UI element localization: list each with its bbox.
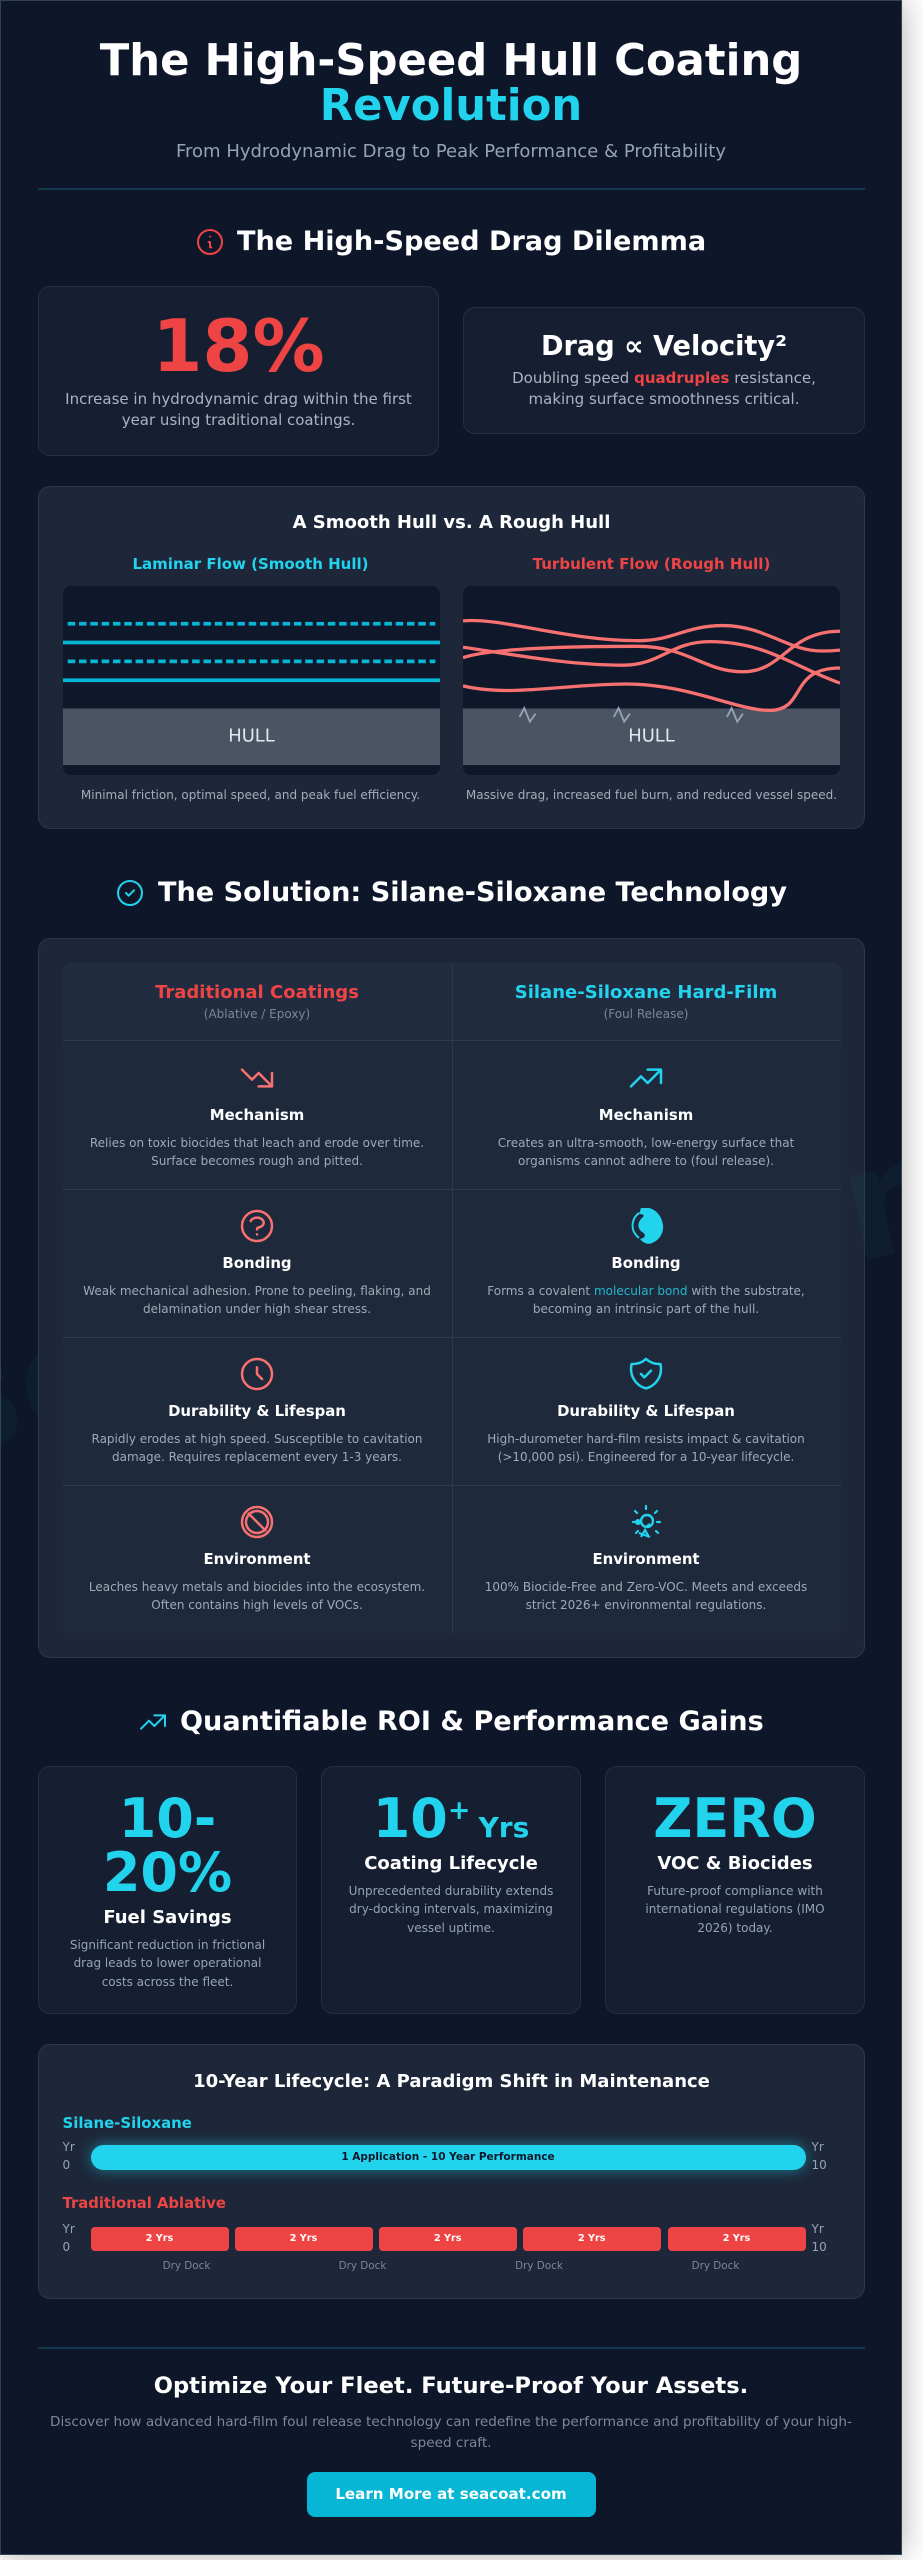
icon: trending up <box>140 1714 166 1730</box>
header: traditional: (Ablative / Epoxy) <box>204 1007 310 1021</box>
label: VOC & Biocides <box>657 1853 813 1874</box>
bar: single application: 1 Application - 10 Year Performance <box>341 2151 555 2163</box>
explanation: making surface smoothness critical. <box>529 390 799 408</box>
panel title: A Smooth Hull vs. A Rough Hull <box>293 512 610 533</box>
dry dock markers: Dry Dock <box>515 2260 563 2272</box>
stat card: fuel savings <box>38 1766 297 2014</box>
dry dock markers: Dry Dock <box>339 2260 386 2272</box>
cell: silane environment: 100% Biocide-Free and Zero-VOC. Meets and exceeds <box>485 1580 807 1594</box>
cell: silane bonding: becoming an intrinsic part of the hull. <box>533 1302 759 1316</box>
cell: traditional durability <box>92 1358 422 1464</box>
description: costs across the fleet. <box>102 1975 233 1989</box>
description: international regulations (IMO <box>645 1902 825 1916</box>
diagram: laminar flow <box>62 586 440 774</box>
title: Revolution <box>320 81 582 131</box>
cell: silane environment: Environment <box>592 1550 700 1568</box>
cell: traditional environment: Environment <box>203 1550 311 1568</box>
stat card: lifecycle <box>321 1766 581 2014</box>
cell: traditional mechanism: Relies on toxic biocides that leach and erode over time. <box>90 1136 424 1150</box>
value: 20% <box>103 1841 232 1904</box>
silane timeline: Yr <box>62 2140 75 2154</box>
bars: five 2-year segments: 2 Yrs <box>290 2232 317 2244</box>
panel: lifecycle timeline <box>38 2044 865 2299</box>
cell: traditional durability: Durability & Lifespan <box>168 1402 346 1420</box>
stat card: 18% <box>38 286 439 456</box>
ablative timeline: Yr <box>62 2222 75 2236</box>
bar: single application <box>90 2145 806 2170</box>
cell: silane mechanism: Mechanism <box>599 1106 693 1124</box>
big number: 18% <box>152 304 325 388</box>
bars: five 2-year segments: 2 Yrs <box>723 2232 750 2244</box>
cell: silane bonding <box>487 1208 805 1316</box>
title <box>100 36 802 131</box>
heading text: Quantifiable ROI & Performance Gains <box>180 1706 764 1737</box>
panel: comparison table <box>63 963 841 1633</box>
dry dock markers: Dry Dock <box>692 2260 739 2272</box>
bars: five 2-year segments <box>91 2227 806 2251</box>
call to action <box>50 2373 852 2517</box>
title: The High-Speed Hull Coating <box>100 36 802 86</box>
cell: silane mechanism: organisms cannot adhere to (foul release). <box>518 1154 774 1168</box>
ablative timeline <box>62 2222 827 2254</box>
description <box>70 1938 265 1989</box>
header: traditional: Traditional Coatings <box>155 982 359 1003</box>
comparison grid <box>62 963 840 1633</box>
CTA button <box>306 2472 596 2517</box>
diagram: turbulent flow <box>463 586 840 774</box>
header: traditional <box>155 982 359 1021</box>
cell: silane mechanism: Creates an ultra-smooth, low-energy surface that <box>498 1136 794 1150</box>
description: Significant reduction in frictional <box>70 1938 265 1952</box>
description: Increase in hydrodynamic drag within the first <box>65 390 412 408</box>
panel: smooth vs rough hull <box>38 486 865 829</box>
cell: traditional durability: Rapidly erodes at high speed. Susceptible to cavitation <box>92 1432 422 1446</box>
CTA text: speed craft. <box>410 2435 491 2451</box>
ablative label: Traditional Ablative <box>62 2195 226 2212</box>
cell: silane bonding: Forms a covalent molecular bond with the substrate, <box>487 1284 805 1298</box>
bars: five 2-year segments: 2 Yrs <box>434 2232 461 2244</box>
value <box>103 1787 232 1904</box>
ablative timeline: 0 <box>62 2240 70 2254</box>
timeline title: 10-Year Lifecycle: A Paradigm Shift in Maintenance <box>193 2071 710 2092</box>
explanation: Doubling speed quadruples resistance, <box>512 368 816 386</box>
heading text: The Solution: Silane-Siloxane Technology <box>158 877 787 908</box>
label: turbulent: Turbulent Flow (Rough Hull) <box>533 555 770 573</box>
cell: silane environment: strict 2026+ environmental regulations. <box>526 1598 766 1612</box>
cell: traditional mechanism <box>90 1068 424 1168</box>
cell: silane durability: (>10,000 psi). Engineered for a 10-year lifecycle. <box>498 1450 794 1464</box>
cell: traditional environment: Often contains high levels of VOCs. <box>151 1598 363 1612</box>
value: ZERO <box>653 1787 817 1850</box>
cell: traditional durability: damage. Requires replacement every 1-3 years. <box>112 1450 402 1464</box>
cell: silane bonding: Bonding <box>611 1254 681 1272</box>
description: 2026) today. <box>697 1921 773 1935</box>
cell: silane durability <box>487 1358 805 1464</box>
cell: traditional mechanism: Surface becomes rough and pitted. <box>151 1154 363 1168</box>
CTA button: Learn More at seacoat.com <box>335 2485 567 2503</box>
description: dry-docking intervals, maximizing <box>349 1902 553 1916</box>
formula card <box>463 307 865 434</box>
description: Future-proof compliance with <box>647 1884 823 1898</box>
ablative timeline: 10 <box>812 2240 827 2254</box>
value: 10- <box>119 1787 216 1850</box>
diagram: turbulent flow: HULL <box>628 726 675 747</box>
description: drag leads to lower operational <box>74 1956 261 1970</box>
silane timeline <box>62 2136 827 2180</box>
description: Unprecedented durability extends <box>349 1884 553 1898</box>
silane timeline: 10 <box>812 2158 827 2172</box>
formula: Drag ∝ Velocity² <box>541 331 787 362</box>
description <box>645 1884 825 1935</box>
stat card: zero VOC <box>605 1766 865 2014</box>
header: silane: (Foul Release) <box>604 1007 688 1021</box>
CTA text: Discover how advanced hard-film foul release technology can redefine the performance and profitability of your high- <box>50 2414 852 2430</box>
cell: silane mechanism <box>498 1068 794 1168</box>
dry dock markers <box>163 2260 740 2272</box>
value: 10+ Yrs <box>373 1787 529 1850</box>
column headers <box>62 963 840 1041</box>
icon: info <box>197 229 223 255</box>
icon: check circle <box>117 880 143 906</box>
heading text: The High-Speed Drag Dilemma <box>237 226 706 256</box>
cell: traditional environment: Leaches heavy metals and biocides into the ecosystem. <box>89 1580 425 1594</box>
explanation <box>512 368 816 408</box>
cell: silane durability: Durability & Lifespan <box>557 1402 735 1420</box>
cell: silane environment <box>485 1504 807 1612</box>
caption: laminar: Minimal friction, optimal speed, and peak fuel efficiency. <box>81 788 420 802</box>
section heading: ROI <box>140 1706 764 1737</box>
diagram: laminar flow: HULL <box>228 726 274 747</box>
description <box>65 390 412 429</box>
description: year using traditional coatings. <box>122 411 355 429</box>
CTA text <box>50 2414 852 2451</box>
label: laminar: Laminar Flow (Smooth Hull) <box>132 555 368 573</box>
silane timeline: 0 <box>62 2158 70 2172</box>
label: Coating Lifecycle <box>364 1853 538 1874</box>
bars: five 2-year segments: 2 Yrs <box>146 2232 173 2244</box>
header <box>100 36 802 162</box>
description: vessel uptime. <box>407 1921 495 1935</box>
cell: silane durability: High-durometer hard-film resists impact & cavitation <box>487 1432 805 1446</box>
section heading: drag dilemma <box>197 226 706 256</box>
bars: five 2-year segments: 2 Yrs <box>578 2232 605 2244</box>
cell: traditional environment <box>89 1506 425 1612</box>
cell: traditional bonding: Bonding <box>222 1254 292 1272</box>
dry dock markers: Dry Dock <box>163 2260 210 2272</box>
header: silane: Silane-Siloxane Hard-Film <box>515 982 777 1003</box>
cell: traditional mechanism: Mechanism <box>210 1106 304 1124</box>
description <box>349 1884 553 1935</box>
silane label: Silane-Siloxane <box>62 2114 192 2132</box>
cell: traditional bonding: delamination under high shear stress. <box>143 1302 371 1316</box>
section heading: solution <box>117 877 787 908</box>
ablative timeline: Yr <box>812 2222 824 2236</box>
CTA heading: Optimize Your Fleet. Future-Proof Your Assets. <box>154 2373 748 2399</box>
caption: turbulent: Massive drag, increased fuel burn, and reduced vessel speed. <box>466 788 837 802</box>
label: Fuel Savings <box>103 1907 232 1928</box>
cell: traditional bonding: Weak mechanical adhesion. Prone to peeling, flaking, and <box>83 1284 431 1298</box>
subtitle: From Hydrodynamic Drag to Peak Performance & Profitability <box>176 141 726 162</box>
header: silane <box>515 982 777 1021</box>
silane timeline: Yr <box>812 2140 824 2154</box>
cell: traditional bonding <box>83 1210 431 1316</box>
